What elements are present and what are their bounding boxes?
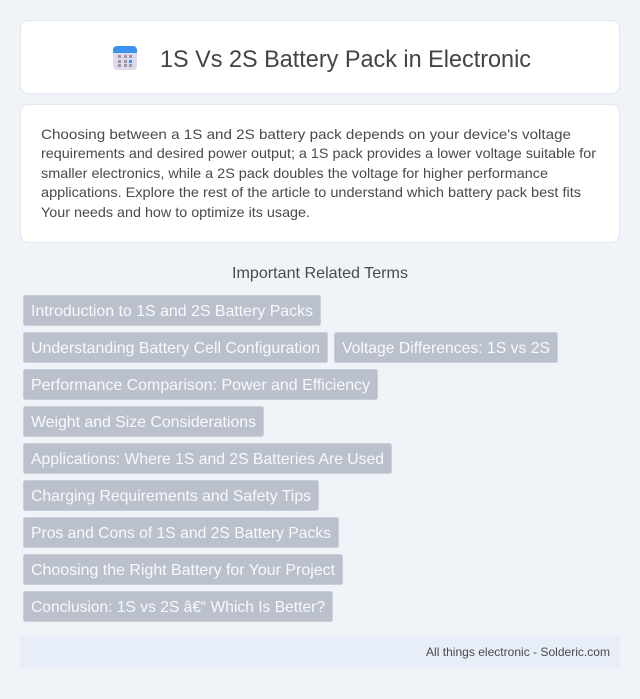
tag: charging — [24, 480, 318, 510]
footer: All things electronic - Solderic.com — [426, 645, 610, 659]
tag: cell configuration — [24, 332, 328, 362]
panel: description: Choosing between a 1S and 2S battery pack depends on your device's voltage — [41, 126, 571, 142]
tag: pros and cons: Pros and Cons of 1S and 2S Battery Packs — [31, 525, 331, 542]
tag: performance — [24, 370, 378, 400]
tag: choosing — [24, 554, 342, 584]
panel: description: Your needs and how to optimize its usage. — [41, 204, 310, 220]
panel: description: smaller electronics, while a 2S pack doubles the voltage for higher performance — [41, 165, 548, 181]
panel: description — [20, 104, 620, 242]
heading: related terms: Important Related Terms — [232, 265, 408, 282]
icon: calendar — [113, 46, 137, 70]
tag: cell configuration: Understanding Battery Cell Configuration — [31, 340, 320, 357]
tag: introduction: Introduction to 1S and 2S Battery Packs — [31, 303, 313, 320]
tag: charging: Charging Requirements and Safety Tips — [31, 488, 311, 505]
tag: conclusion: Conclusion: 1S vs 2S â€“ Which Is Better? — [31, 599, 325, 616]
footer — [20, 635, 620, 669]
tag: weight and size: Weight and Size Considerations — [31, 414, 256, 431]
tag: voltage differences — [334, 332, 558, 362]
tag: introduction — [24, 296, 320, 326]
tag: weight and size — [24, 406, 264, 436]
tag: voltage differences: Voltage Differences: 1S vs 2S — [342, 340, 550, 357]
panel: description: requirements and desired power output; a 1S pack provides a lower voltage suitable for — [41, 145, 596, 161]
tag: applications: Applications: Where 1S and 2S Batteries Are Used — [31, 451, 384, 468]
tag: pros and cons — [24, 518, 338, 548]
tag: applications — [24, 444, 392, 474]
panel: description: applications. Explore the rest of the article to understand which battery pack best fits — [41, 184, 581, 200]
header panel — [20, 20, 620, 94]
title: 1S Vs 2S Battery Pack in Electronic — [160, 46, 531, 73]
tag: performance: Performance Comparison: Power and Efficiency — [31, 377, 370, 394]
tag: conclusion — [24, 592, 332, 622]
tag: choosing: Choosing the Right Battery for Your Project — [31, 562, 336, 579]
